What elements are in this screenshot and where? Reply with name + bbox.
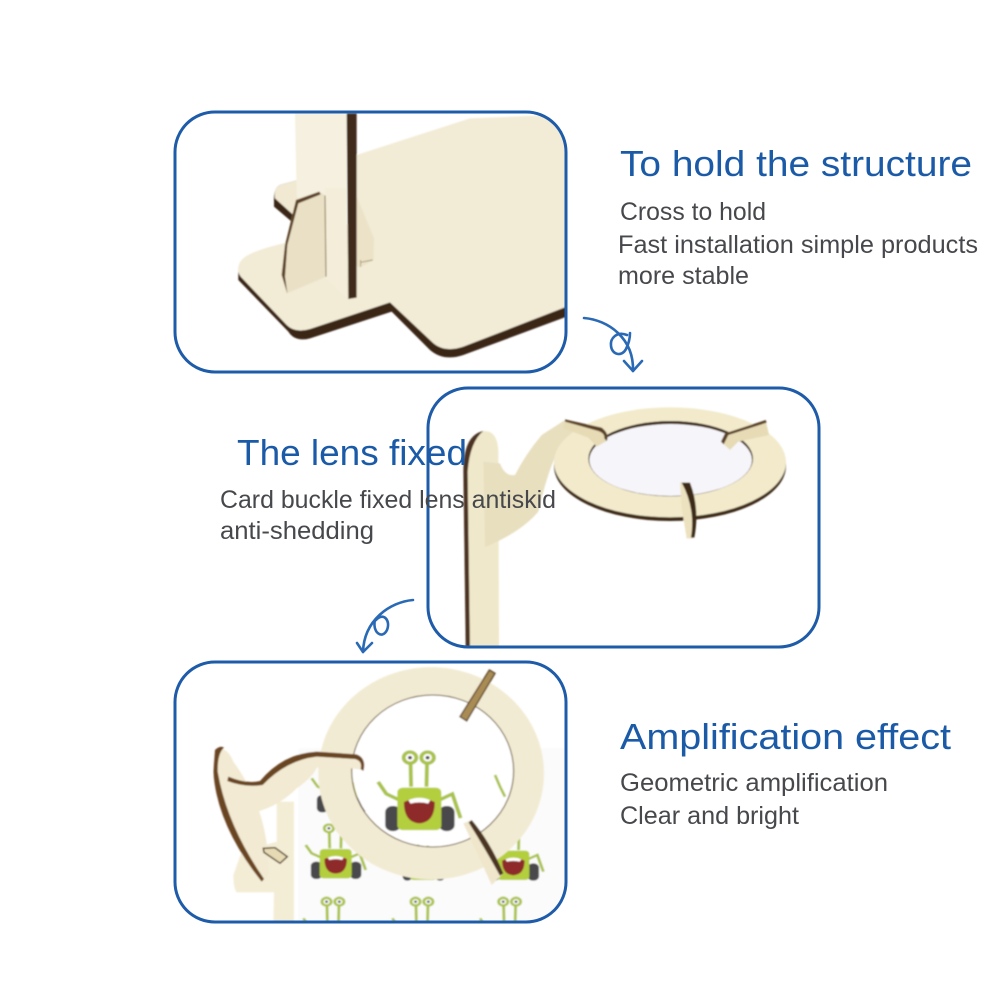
text block: structure description: Fast installation simple products — [618, 231, 978, 259]
ring edge — [554, 411, 786, 521]
ring — [554, 407, 786, 517]
base plate — [238, 116, 567, 349]
magnified robot — [378, 750, 461, 831]
base plate edge — [238, 272, 567, 357]
stand base — [233, 802, 294, 922]
ring — [318, 667, 544, 879]
text block: lens description — [220, 486, 556, 545]
foot tab — [263, 848, 287, 863]
text block: structure description — [618, 198, 978, 290]
panel: lens clip photo — [428, 388, 819, 647]
heading: the lens fixed: The lens fixed — [237, 432, 467, 473]
panel outline — [175, 112, 566, 372]
arrow: first to second panel — [584, 318, 642, 371]
bottom clip — [463, 820, 503, 885]
text block: amplification description: Geometric amplification — [620, 769, 888, 797]
heading: amplification effect: Amplification effect — [620, 716, 951, 757]
arrow: second to third panel — [357, 600, 413, 652]
arm — [483, 420, 573, 547]
side plate — [216, 748, 268, 851]
text block: structure description: more stable — [618, 262, 749, 290]
panel: amplification photo — [175, 662, 566, 952]
upright — [463, 431, 499, 647]
text block: amplification description: Clear and bright — [620, 802, 799, 830]
text block: lens description: anti-shedding — [220, 517, 374, 545]
lens — [588, 421, 753, 496]
paper — [298, 748, 565, 922]
upright — [294, 114, 348, 200]
clips — [564, 422, 607, 447]
text block: lens description: Card buckle fixed lens antiskid — [220, 486, 556, 514]
heading: to hold the structure: To hold the structure — [620, 143, 972, 184]
top clip — [460, 670, 495, 721]
panel: structure base photo — [175, 112, 567, 372]
back tab — [274, 180, 298, 222]
panel outline — [428, 388, 819, 647]
text block: structure description: Cross to hold — [620, 198, 766, 226]
printed robots — [306, 823, 366, 879]
right gusset — [356, 198, 374, 267]
arm — [248, 756, 362, 812]
text block: amplification description — [620, 769, 888, 830]
panel outline — [175, 662, 566, 922]
left gusset — [282, 192, 326, 293]
inner lens area — [353, 696, 513, 846]
